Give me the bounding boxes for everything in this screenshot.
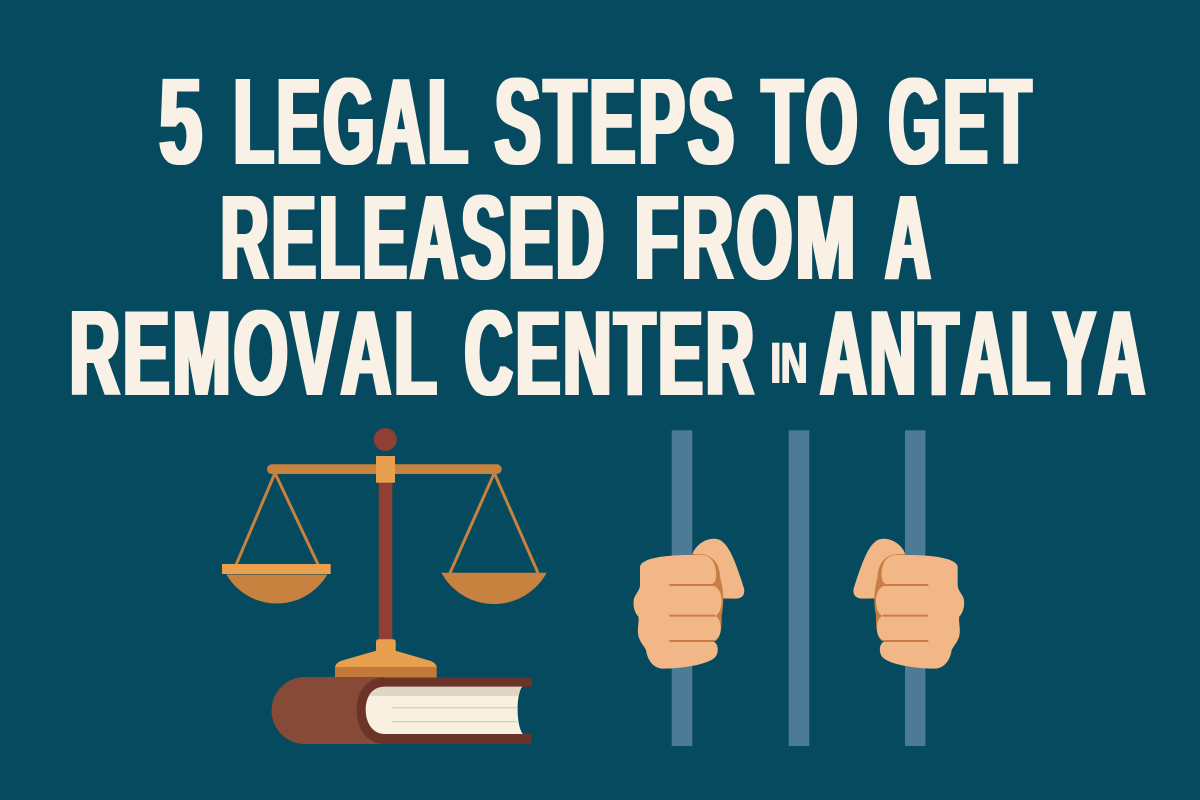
title line 2: FROM	[635, 169, 859, 305]
knob	[374, 428, 397, 451]
icon: scales of justice on book	[222, 428, 547, 744]
title line 1: LEGAL	[234, 53, 471, 191]
title line 1	[159, 53, 1034, 191]
title line 3: REMOVAL	[70, 285, 440, 421]
book inner binding	[357, 678, 532, 744]
left bar	[672, 430, 692, 746]
left pan bowl	[226, 574, 327, 603]
right pan strings	[450, 473, 538, 573]
pages top shade	[370, 687, 522, 696]
title line 1: 5	[159, 53, 206, 191]
title line 1: TO	[762, 53, 861, 191]
beam	[267, 464, 502, 474]
middle bar	[789, 430, 809, 746]
pole	[379, 480, 392, 640]
collar	[376, 456, 395, 483]
icon: prison bars with hands	[634, 430, 964, 746]
base	[335, 639, 437, 668]
left pan strings	[236, 473, 318, 565]
base lower band	[335, 667, 437, 678]
book cover	[271, 677, 385, 744]
title line 3: CENTER	[465, 285, 757, 421]
right pan bowl	[441, 573, 547, 604]
title line 2: RELEASED	[221, 169, 607, 305]
book pages	[366, 687, 523, 734]
title line 1: GET	[889, 53, 1034, 191]
left pan rim	[222, 564, 331, 574]
small word: in: IN	[771, 331, 807, 396]
left hand	[634, 539, 744, 669]
title	[70, 53, 1148, 421]
right hand	[853, 539, 964, 669]
title line 3	[70, 285, 1148, 421]
right bar	[905, 430, 925, 746]
page lines	[392, 708, 517, 722]
title line 1: STEPS	[495, 53, 737, 191]
title line 2: A	[885, 169, 934, 305]
